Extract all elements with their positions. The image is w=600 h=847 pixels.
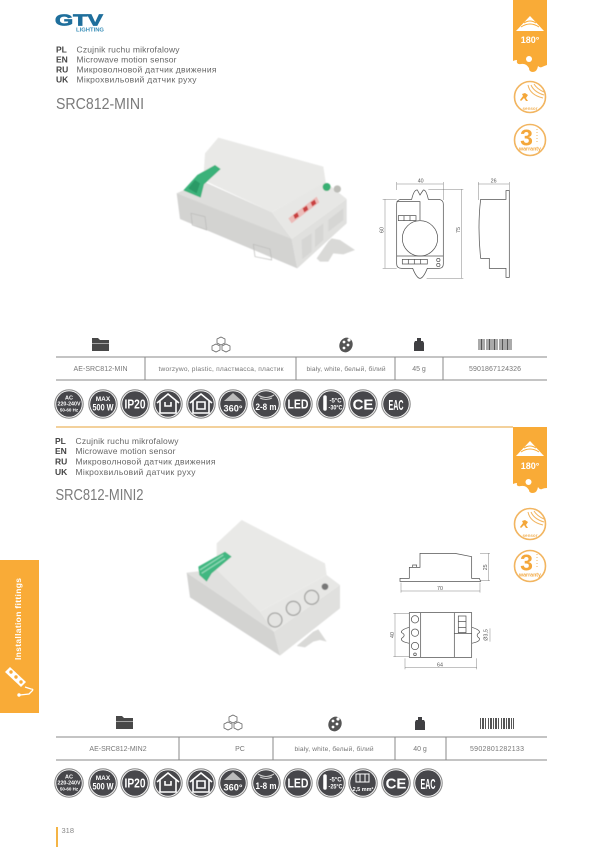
badge: IP20: IP20	[124, 398, 146, 412]
badge: wire 2.5 mm	[349, 769, 377, 797]
icon: sensor badge 2	[514, 508, 546, 540]
icon: material cubes 1	[212, 337, 230, 352]
logo: GTV Lighting	[55, 12, 104, 34]
badge: indoor house	[187, 390, 215, 418]
badge: 360 degrees	[219, 390, 247, 418]
logo: GTV Lighting: GTV	[55, 12, 104, 30]
text block: product names section 1: EN	[56, 54, 68, 64]
technical drawing: SRC812-MINI2 dimensions: 40	[390, 632, 396, 638]
badge: max 500 W: 500 W	[92, 402, 114, 414]
icon: folder 1	[92, 338, 109, 351]
text block: product names section 1: Микроволновой датчик движения	[76, 64, 217, 74]
icon: 3 year warranty badge 1: 3	[520, 124, 533, 150]
text block: product names section 2: Czujnik ruchu mikrofalowy	[76, 436, 179, 446]
badge: AC voltage: AC	[65, 396, 73, 402]
badge: ceiling house	[154, 390, 182, 418]
text block: product names section 2: PL	[55, 436, 66, 446]
icon: folder 2	[116, 716, 133, 729]
table: SRC812-MINI specifications: 45 g	[412, 366, 426, 373]
badge: 360 degrees: 360°	[224, 782, 243, 792]
badge: LED: LED	[288, 776, 308, 790]
badge: wire 2.5 mm: 2,5 mm²	[353, 786, 374, 793]
technical drawing: SRC812-MINI2 dimensions: 70	[437, 586, 443, 592]
text block: product names section 1: RU	[56, 64, 68, 74]
badge: AC voltage: 220-240V	[58, 402, 81, 408]
badge: indoor house	[187, 769, 215, 797]
icon: power strip	[5, 667, 33, 697]
icon: 3 year warranty badge 1	[514, 124, 546, 156]
logo: GTV Lighting: LIGHTING	[76, 28, 104, 34]
badge: IP20	[121, 769, 149, 797]
badge: 360 degrees	[219, 769, 247, 797]
badge: AC voltage: 50-60 Hz	[60, 786, 79, 792]
badge: AC voltage: 220-240V	[58, 780, 81, 786]
table: SRC812-MINI specifications: biały, white, белый, білий	[306, 365, 386, 373]
table: SRC812-MINI2 specifications: 5902801282133	[470, 746, 524, 753]
badge: temperature	[317, 390, 345, 418]
badge: max 500 W	[89, 390, 117, 418]
badge: 1-8 m range: 1-8 m	[256, 781, 276, 792]
technical drawing: SRC812-MINI dimensions: 26	[491, 179, 497, 185]
icon: weight 2	[415, 717, 425, 730]
table: SRC812-MINI2 specifications	[56, 737, 547, 760]
badge: 1-8 m range	[252, 769, 280, 797]
product photo: SRC812-MINI sensor	[177, 138, 355, 268]
text block: product names section 2: Микроволновой датчик движения	[76, 456, 216, 466]
badge: max 500 W	[89, 769, 117, 797]
ribbon: 180 degree section 1	[513, 0, 547, 72]
badge: temperature: -25°C	[328, 784, 343, 790]
badge: IP20	[121, 390, 149, 418]
badge: max 500 W: MAX	[96, 775, 111, 782]
page number marker	[56, 826, 74, 847]
technical drawing: SRC812-MINI2 dimensions	[390, 553, 490, 669]
badge: temperature: -5°C	[329, 778, 342, 784]
text block: product names section 1: Czujnik ruchu mikrofalowy	[76, 44, 180, 54]
icon: material cubes 2	[224, 715, 242, 730]
badge: LED	[284, 769, 312, 797]
section divider line	[56, 426, 513, 428]
badge: temperature: -30°C	[328, 406, 343, 412]
icon: colour palette 1	[337, 335, 355, 355]
table: SRC812-MINI2 specifications: AE-SRC812-MIN2	[89, 746, 147, 753]
badge: EAC: EAC	[420, 776, 436, 793]
badge: max 500 W: 500 W	[92, 782, 114, 792]
technical drawing: SRC812-MINI dimensions	[380, 179, 509, 278]
badge: 2-8 m range: 2-8 m	[256, 402, 276, 413]
side tab: Installation fittings	[0, 560, 39, 713]
text block: product names section 2: RU	[55, 456, 67, 466]
text block: product names section 1	[56, 44, 217, 84]
technical drawing: SRC812-MINI dimensions: 60	[380, 227, 386, 233]
icon: 3 year warranty badge 2: 3	[520, 550, 533, 576]
icon: sensor badge 1	[514, 82, 546, 112]
text block: product names section 2	[55, 436, 216, 477]
heading: SRC812-MINI: SRC812-MINI	[56, 96, 144, 113]
technical drawing: SRC812-MINI dimensions: 75	[456, 227, 462, 233]
icon: sensor badge 2: sensor	[522, 533, 538, 538]
text block: product names section 1: Мікрохвильовий датчик руху	[76, 74, 197, 84]
text block: product names section 2: EN	[55, 446, 67, 456]
icon row: SRC812-MINI features	[55, 390, 410, 418]
badge: EAC: EAC	[388, 397, 404, 414]
badge: IP20: IP20	[124, 776, 146, 790]
badge: CE: CE	[386, 776, 406, 792]
heading: SRC812-MINI2: SRC812-MINI2	[56, 487, 144, 504]
technical drawing: SRC812-MINI2 dimensions: 25	[483, 564, 489, 570]
badge: temperature	[317, 769, 345, 797]
badge: AC voltage	[55, 769, 83, 797]
text block: product names section 2: Мікрохвильовий датчик руху	[76, 467, 196, 477]
text block: product names section 1: Microwave motion sensor	[76, 54, 177, 64]
badge: EAC	[382, 390, 410, 418]
icon: colour palette 2	[326, 714, 344, 734]
product photo: SRC812-MINI2 sensor	[187, 520, 340, 656]
badge: CE	[382, 769, 410, 797]
badge: EAC	[414, 769, 442, 797]
table: SRC812-MINI specifications: tworzywo, plastic, пластмасса, пластик	[158, 366, 284, 373]
text block: product names section 1: PL	[56, 44, 67, 54]
table: SRC812-MINI specifications: 5901867124326	[469, 366, 521, 373]
icon: 3 year warranty badge 2	[514, 550, 546, 582]
badge: LED: LED	[288, 398, 308, 412]
text block: product names section 1: UK	[56, 74, 69, 84]
icon: barcode 2	[480, 718, 514, 729]
badge: temperature: -5°C	[329, 398, 342, 404]
icon: barcode 1	[478, 339, 512, 350]
table: SRC812-MINI2 specifications: biały, white, белый, білий	[294, 745, 374, 753]
icon: 3 year warranty badge 1: warranty	[518, 146, 542, 152]
badge: CE: CE	[353, 396, 373, 414]
page number marker: 318	[62, 826, 74, 835]
icon: weight 1	[414, 338, 424, 351]
badge: AC voltage: AC	[65, 774, 73, 780]
table: SRC812-MINI2 specifications: 40 g	[413, 746, 427, 753]
ribbon: 180 degree section 2: 180°	[521, 461, 540, 471]
badge: CE	[349, 390, 377, 418]
table: SRC812-MINI specifications: AE-SRC812-MIN	[74, 366, 128, 373]
badge: AC voltage: 50-60 Hz	[60, 408, 79, 412]
text block: product names section 2: Microwave motion sensor	[76, 446, 176, 456]
badge: ceiling house	[154, 769, 182, 797]
technical drawing: SRC812-MINI2 dimensions: Ø3,5	[484, 629, 490, 641]
badge: AC voltage	[55, 390, 83, 418]
badge: 360 degrees: 360°	[224, 404, 243, 414]
technical drawing: SRC812-MINI dimensions: 40	[418, 179, 424, 185]
icon: 3 year warranty badge 2: warranty	[518, 572, 542, 578]
technical drawing: SRC812-MINI2 dimensions: 64	[437, 663, 443, 669]
badge: LED	[284, 390, 312, 418]
text block: product names section 2: UK	[55, 467, 68, 477]
badge: max 500 W: MAX	[96, 396, 111, 403]
icon: sensor badge 1: sensor	[522, 106, 538, 111]
table: SRC812-MINI specifications	[56, 357, 547, 380]
badge: 2-8 m range	[252, 390, 280, 418]
side tab: Installation fittings: Installation fittings	[13, 578, 23, 660]
ribbon: 180 degree section 1: 180°	[521, 35, 540, 45]
table: SRC812-MINI2 specifications: PC	[235, 746, 245, 753]
ribbon: 180 degree section 2	[513, 427, 547, 493]
icon row: SRC812-MINI2 features	[55, 769, 442, 797]
